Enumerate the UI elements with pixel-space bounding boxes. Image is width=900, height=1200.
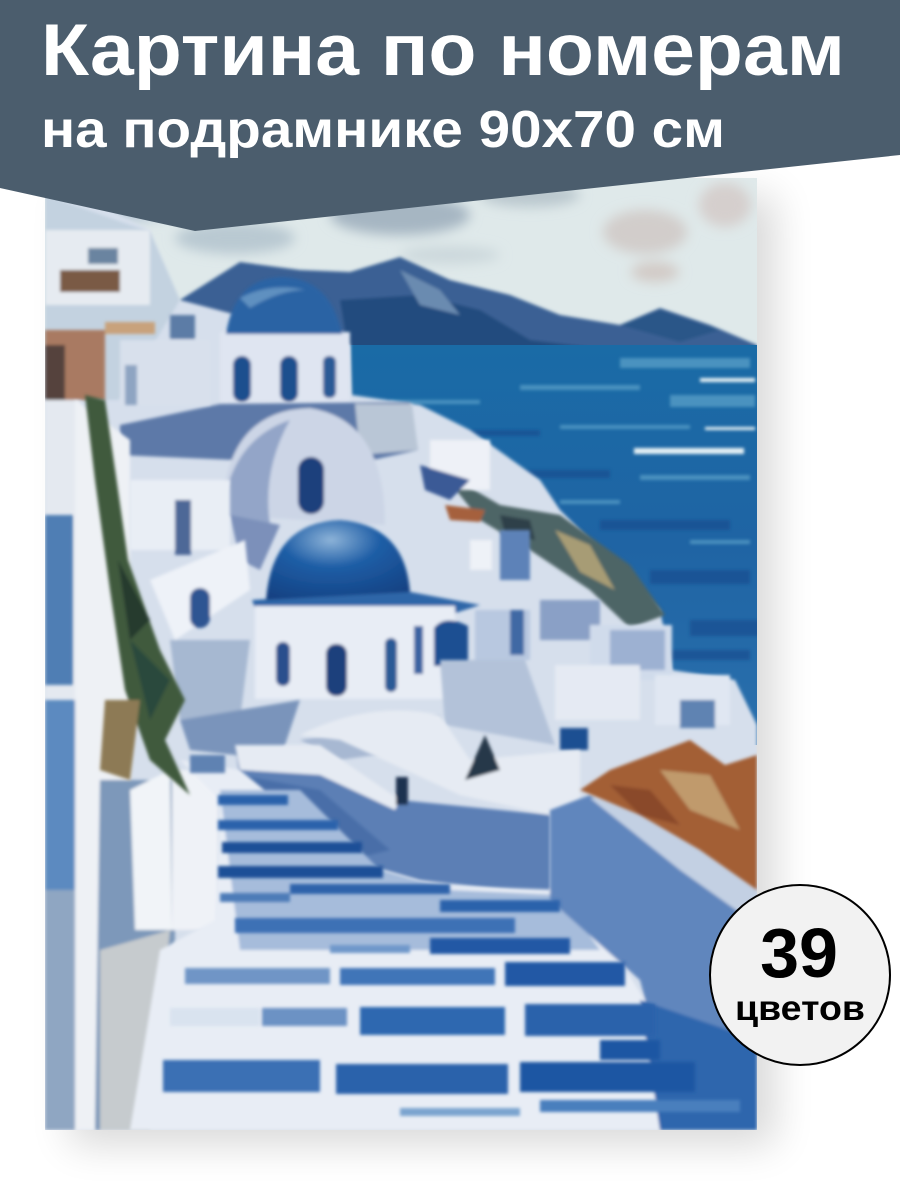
climbing vine — [85, 395, 190, 795]
central wall and lower path — [235, 710, 580, 895]
subtitle: на подрамнике 90х70 см — [41, 101, 725, 159]
middle roof and arch — [120, 402, 418, 570]
dry orange bushes — [580, 740, 757, 890]
sky with clouds — [45, 178, 757, 344]
top-left houses — [45, 229, 210, 700]
rocky slope — [443, 488, 666, 627]
stairs area — [130, 760, 757, 1130]
number of colours: 39 — [760, 914, 838, 992]
village hillside base — [45, 198, 757, 996]
colours label: цветов — [735, 989, 865, 1028]
left wall — [45, 400, 218, 1130]
colour count badge — [710, 885, 890, 1065]
stair steps — [163, 755, 740, 1116]
upper church — [220, 277, 350, 404]
canvas drop shadow — [70, 195, 775, 1145]
sea — [340, 345, 760, 745]
title: Картина по номерам — [41, 10, 845, 91]
lower church — [252, 520, 480, 699]
painting on canvas — [45, 178, 760, 1130]
distant mountains — [179, 254, 757, 345]
header banner — [0, 0, 900, 231]
village side buildings — [130, 440, 730, 760]
